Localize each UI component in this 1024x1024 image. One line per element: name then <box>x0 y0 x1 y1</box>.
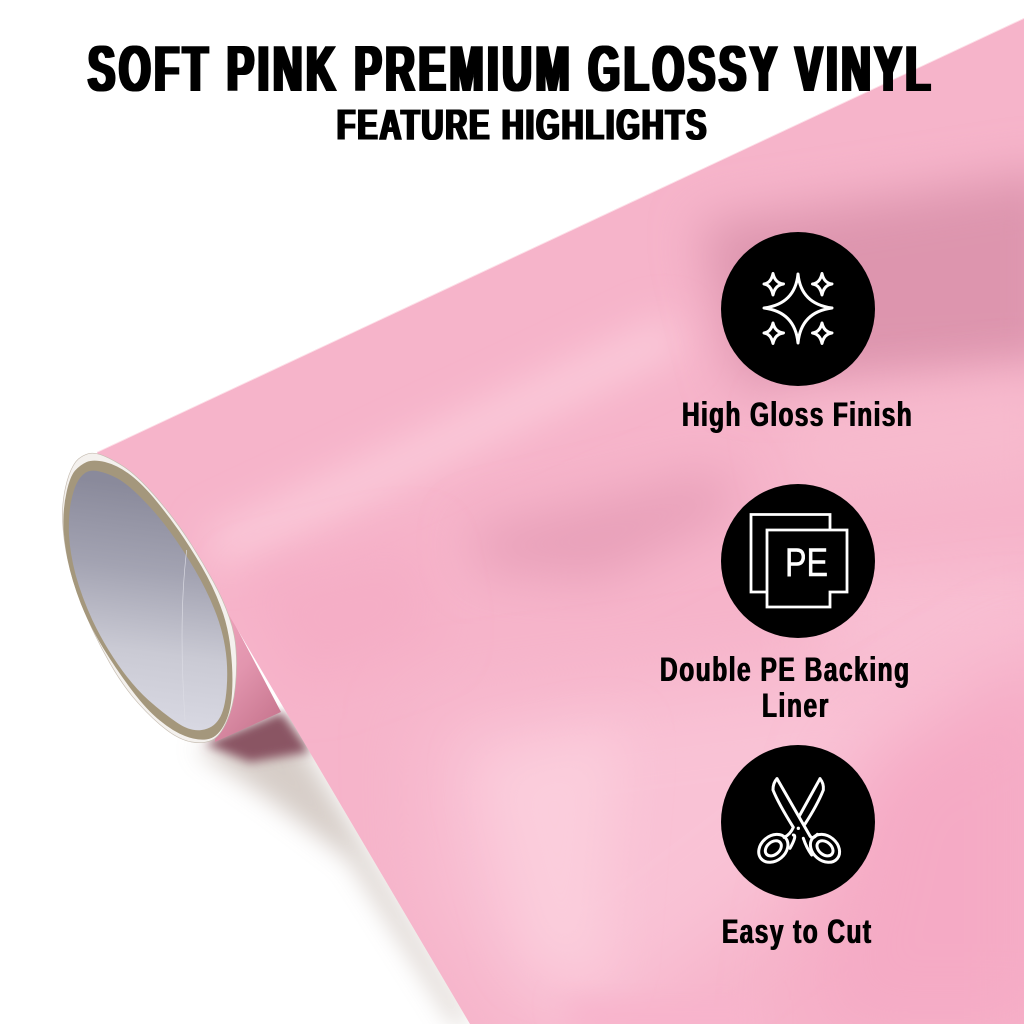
icon: pe layers: PE <box>785 541 828 585</box>
label: easy to cut: Easy to Cut <box>722 913 871 951</box>
title: SOFT PINK PREMIUM GLOSSY VINYL <box>88 34 930 105</box>
white liner edge <box>62 453 237 743</box>
floor shadow under roll <box>195 712 470 1024</box>
inner tube <box>69 471 227 730</box>
icon: sparkles <box>721 232 875 386</box>
cardboard ring <box>63 461 232 740</box>
label: high gloss finish: High Gloss Finish <box>682 396 912 434</box>
feature: high gloss finish <box>682 232 912 434</box>
feature: double pe backing liner <box>660 484 909 725</box>
icon: pe layers <box>721 484 875 638</box>
feature: easy to cut <box>721 745 875 951</box>
label: double pe backing liner <box>660 651 909 725</box>
label: double pe backing liner: Liner <box>762 687 829 725</box>
subtitle: FEATURE HIGHLIGHTS <box>337 100 706 149</box>
label: double pe backing liner: Double PE Backing <box>660 651 909 689</box>
roll end: cardboard core <box>62 453 237 743</box>
folded underside of sheet <box>215 600 281 742</box>
icon: scissors <box>721 745 875 899</box>
